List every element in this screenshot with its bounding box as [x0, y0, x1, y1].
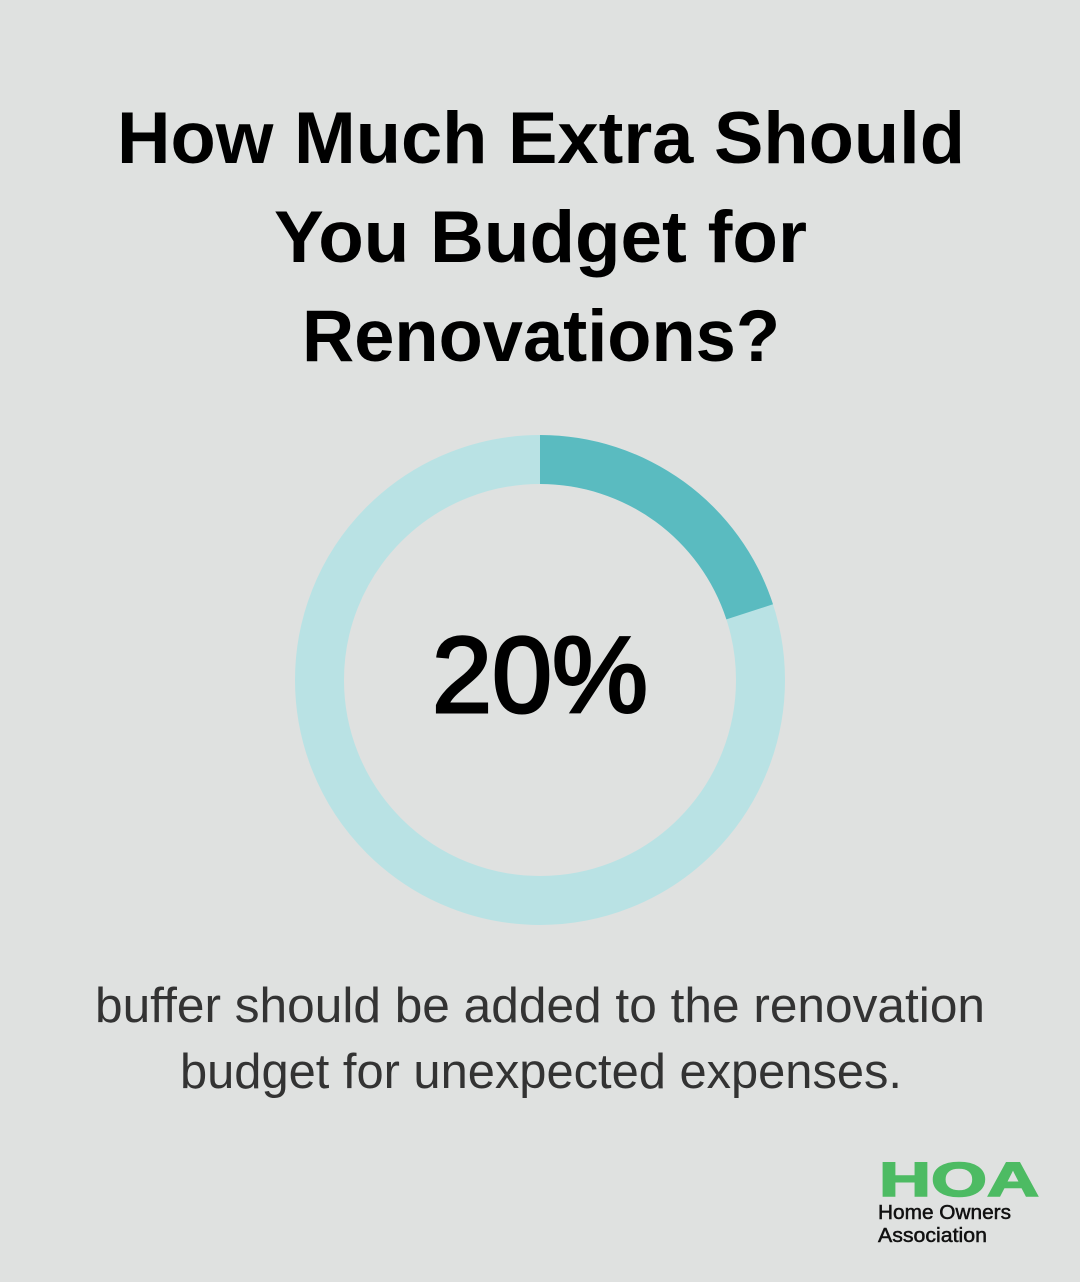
logo name: [878, 1202, 1011, 1247]
donut track: [320, 460, 760, 900]
description text: [95, 979, 985, 1099]
logo name: Home Owners: [878, 1202, 1011, 1224]
title: You Budget for: [274, 197, 807, 278]
description text: budget for unexpected expenses.: [180, 1045, 902, 1099]
logo name: Association: [878, 1225, 987, 1247]
title: How Much Extra Should: [117, 98, 965, 179]
title: Renovations?: [302, 296, 780, 377]
donut value: 20%: [432, 614, 648, 735]
description text: buffer should be added to the renovation: [95, 979, 985, 1033]
donut chart: 20 percent: [320, 435, 773, 900]
logo mark: HOA: [879, 1154, 1039, 1207]
title: [117, 98, 965, 377]
donut highlighted segment: [540, 435, 773, 619]
logo: Home Owners Association: [878, 1154, 1039, 1247]
